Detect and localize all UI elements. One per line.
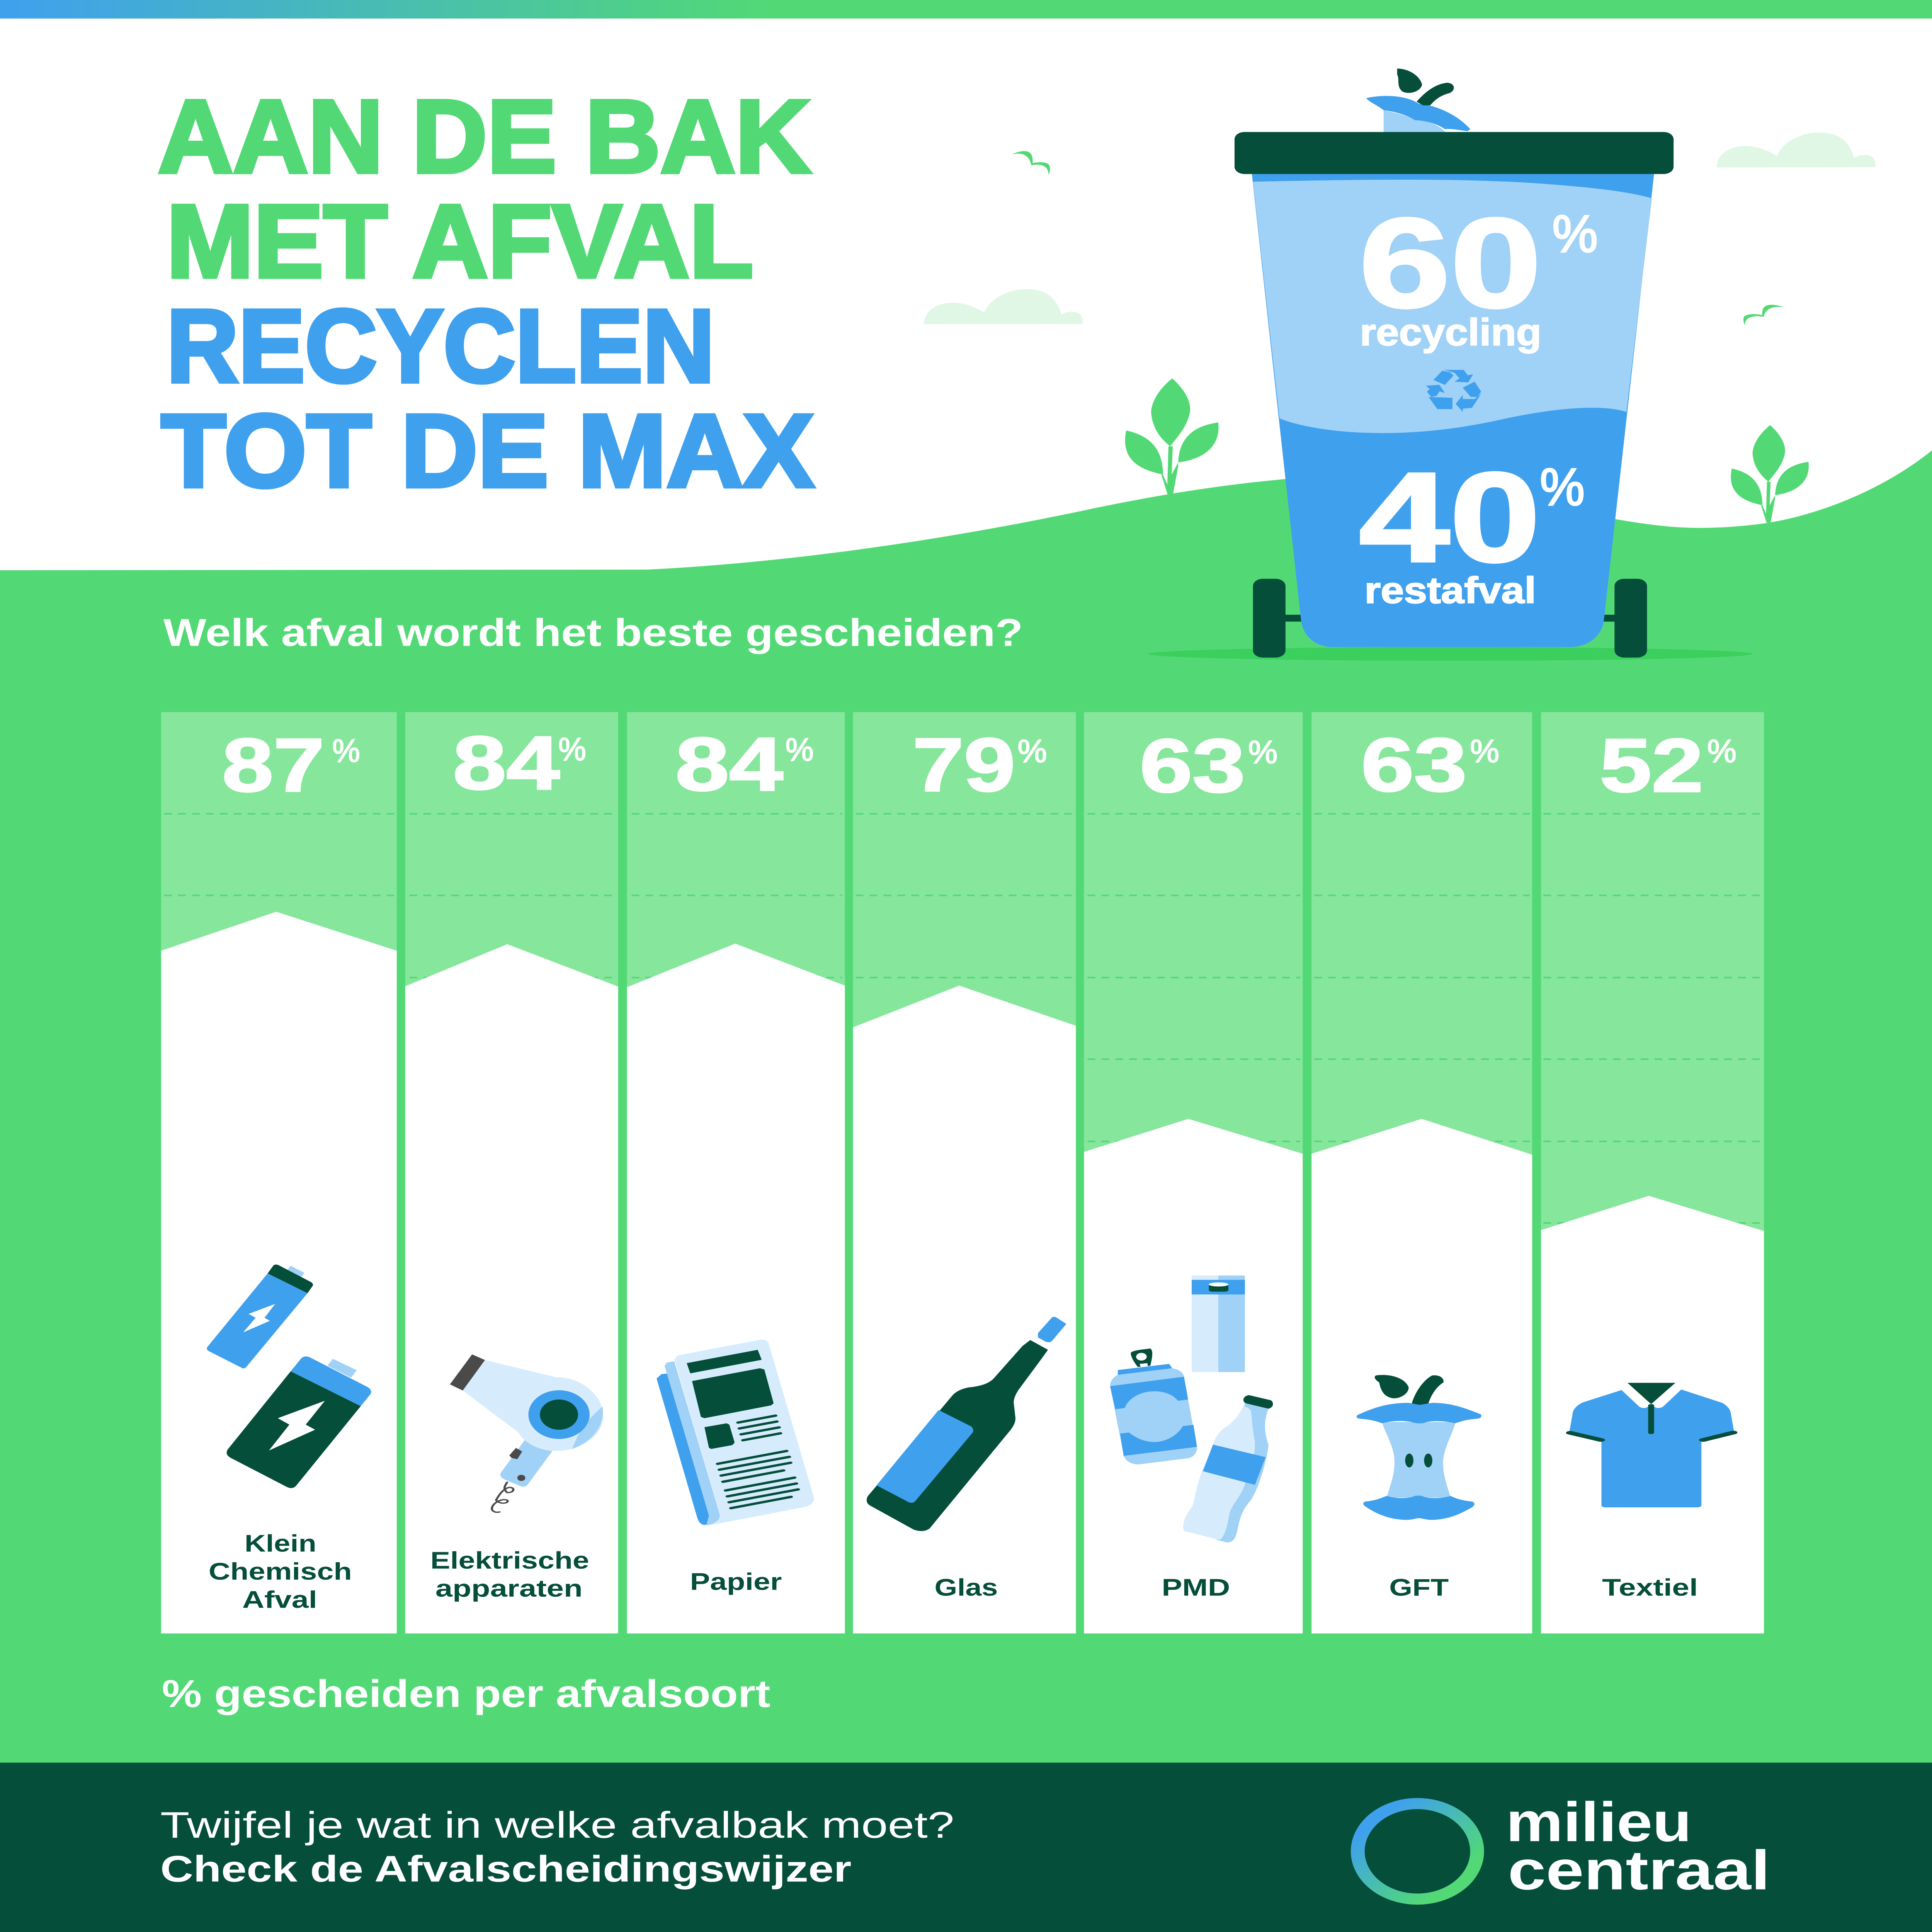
label: PMD: PMD — [1162, 1574, 1230, 1601]
label: Papier: Papier — [690, 1568, 782, 1595]
bar 63% — [1311, 1119, 1532, 1633]
illustration: plants — [1125, 378, 1809, 523]
label: Klein Chemisch Afval: Chemisch — [209, 1558, 352, 1585]
icon: hair dryer — [450, 1354, 603, 1512]
bin shadow — [1148, 647, 1753, 661]
bin stat: 40%: % — [1540, 457, 1585, 516]
column: Glas — [853, 723, 1076, 1633]
value 84%: % — [558, 731, 586, 767]
chart caption: % gescheiden per afvalsoort — [162, 1672, 770, 1715]
bin stat: 40% — [1359, 446, 1585, 611]
column: Textiel — [1541, 723, 1764, 1633]
logo wordmark: centraal — [1508, 1839, 1770, 1901]
column: PMD — [1084, 724, 1303, 1633]
value 52%: % — [1707, 733, 1736, 769]
bin lid — [1235, 132, 1673, 174]
icon: apple core — [1357, 1375, 1481, 1520]
label: Textiel: Textiel — [1602, 1574, 1698, 1601]
value 84%: % — [786, 731, 814, 768]
icon: right plant — [1731, 425, 1809, 523]
logo: Milieu Centraal — [1358, 1791, 1770, 1901]
footer panel — [0, 1763, 1932, 1932]
value 52%: 52 — [1600, 723, 1703, 808]
title: TOT DE MAX — [161, 393, 815, 509]
heading: question: Welk afval wordt het beste gescheiden? — [163, 611, 1023, 654]
title: MET AFVAL — [167, 184, 753, 299]
green hill background — [0, 450, 1932, 1765]
label: Elektrische apparaten: Elektrische — [430, 1547, 589, 1574]
value 84%: 84 — [453, 721, 560, 805]
footer text: Check de Afvalscheidingswijzer — [160, 1849, 852, 1890]
icon: newspaper — [656, 1340, 814, 1525]
column: Papier — [627, 722, 845, 1633]
bin stat: 40%: 40 — [1359, 446, 1540, 588]
apple core on bin — [1366, 68, 1470, 133]
title: AAN DE BAK — [158, 78, 811, 194]
label: Elektrische apparaten — [430, 1547, 589, 1602]
bar 63% — [1084, 1119, 1303, 1633]
bin stat: 40%: restafval — [1364, 570, 1536, 611]
title — [158, 78, 815, 509]
bar 84% — [405, 944, 618, 1633]
value 63%: % — [1248, 734, 1277, 770]
logo ring — [1358, 1804, 1477, 1899]
value 63%: 63 — [1139, 724, 1245, 808]
icon: bird left — [1012, 151, 1050, 175]
column backgrounds — [161, 712, 1764, 1633]
logo wordmark: milieu — [1506, 1791, 1692, 1853]
label: Klein Chemisch Afval — [209, 1530, 352, 1613]
label: Klein Chemisch Afval: Klein — [245, 1530, 316, 1557]
value 63%: % — [1470, 733, 1499, 769]
value 87%: 87 — [222, 723, 325, 808]
value 84%: 84 — [675, 722, 783, 807]
icon: cloud left — [924, 289, 1083, 324]
value 79%: 79 — [913, 723, 1015, 807]
top gradient bar — [0, 0, 1932, 19]
icon: batteries — [207, 1265, 371, 1488]
footer text: Twijfel je wat in welke afvalbak moet? — [160, 1804, 954, 1846]
bar 87% — [161, 912, 397, 1633]
value 63%: 63 — [1361, 723, 1467, 807]
column: GFT — [1311, 723, 1532, 1633]
bar 79% — [853, 986, 1076, 1633]
icon: bird right — [1743, 305, 1785, 325]
bin shapes — [1148, 68, 1753, 661]
bar 52% — [1541, 1196, 1764, 1633]
logo wordmark — [1506, 1791, 1770, 1901]
illustration: waste bin — [1148, 68, 1753, 661]
recycling share — [1253, 180, 1652, 433]
icon: glass bottle — [867, 1317, 1066, 1531]
value 79%: % — [1017, 733, 1047, 769]
icon: polo shirt — [1570, 1383, 1734, 1507]
label: GFT: GFT — [1389, 1574, 1449, 1601]
bin stat: 60%: recycling — [1360, 311, 1541, 354]
footer text — [160, 1804, 954, 1890]
label: Elektrische apparaten: apparaten — [435, 1575, 583, 1602]
icon: cloud right — [1717, 133, 1875, 168]
label: Glas: Glas — [935, 1574, 998, 1601]
icon: left plant — [1125, 378, 1219, 496]
label: Klein Chemisch Afval: Afval — [242, 1586, 317, 1613]
bar 84% — [627, 944, 845, 1633]
column: Klein Chemisch Afval — [161, 723, 397, 1633]
column: Elektrische apparaten — [405, 721, 618, 1633]
bin stat: 60% — [1359, 192, 1598, 354]
bin stat: 60%: 60 — [1359, 192, 1541, 334]
value 87%: % — [332, 733, 360, 769]
icon: recycling symbol — [1426, 370, 1481, 412]
title: RECYCLEN — [167, 288, 715, 404]
bin stat: 60%: % — [1552, 204, 1598, 263]
chart: percentage separated per waste type — [161, 712, 1764, 1633]
bin axle and wheels — [1253, 579, 1647, 658]
icon: carton, can and plastic bottle — [1110, 1276, 1273, 1543]
bin body — [1252, 174, 1654, 647]
